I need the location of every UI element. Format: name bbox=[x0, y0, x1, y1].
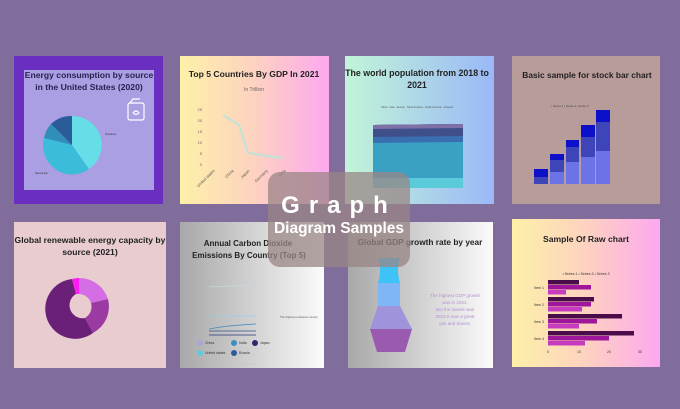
area chart bbox=[373, 124, 463, 188]
legend: United states bbox=[205, 351, 226, 355]
panel: renewable energy: Global renewable energy capacity by bbox=[15, 235, 166, 245]
panel: energy consumption bbox=[14, 56, 163, 204]
pie chart: Natural gas bbox=[35, 172, 49, 175]
panel: GDP top 5: Germany bbox=[254, 168, 269, 183]
title overlay bbox=[268, 172, 410, 267]
panel: world population bbox=[345, 56, 494, 204]
callout text: But the lowest was bbox=[436, 307, 475, 312]
panel: GDP top 5: 5 bbox=[200, 151, 203, 156]
panel: raw chart: Item 4 bbox=[534, 337, 544, 341]
callout text: The highest GDP growth bbox=[430, 293, 481, 298]
legend: Japan bbox=[260, 341, 270, 345]
panel: GDP top 5: Japan bbox=[239, 168, 251, 179]
panel: renewable energy bbox=[14, 222, 166, 368]
panel: GDP growth: Global GDP growth rate by year bbox=[358, 237, 483, 247]
line chart: emissions bbox=[209, 285, 256, 364]
legend: Russia bbox=[239, 351, 250, 355]
panel: raw chart: Sample Of Raw chart bbox=[543, 234, 629, 244]
panel: raw chart: 30 bbox=[638, 350, 642, 354]
callout text: 2019.It was a great bbox=[435, 314, 475, 319]
panel: world population: 2021 bbox=[407, 80, 427, 90]
panel: raw chart: • Series 1 • Series 2 • Series 3 bbox=[562, 272, 610, 276]
panel: GDP top 5 bbox=[180, 56, 329, 204]
heading: energy: Energy consumption by source bbox=[25, 70, 153, 80]
panel: CO2 emissions bbox=[180, 222, 324, 368]
panel: GDP top 5: 20 bbox=[198, 118, 203, 123]
panel: CO2 emissions: Annual Carbon Dioxide bbox=[204, 239, 293, 248]
panel: raw chart: 0 bbox=[547, 350, 549, 354]
legend: China bbox=[205, 341, 214, 345]
panel: stock bar chart: • Series 1 • Series 2 • Series 3 bbox=[551, 104, 589, 108]
panel: raw chart: 20 bbox=[607, 350, 611, 354]
stacked bars bbox=[534, 110, 610, 184]
line chart bbox=[223, 115, 283, 158]
callout text: ups and downs. bbox=[439, 321, 471, 326]
panel: raw chart bbox=[512, 219, 660, 367]
callout text bbox=[430, 293, 481, 326]
panel: GDP top 5: United states bbox=[196, 168, 216, 188]
panel: raw chart: Item 2 bbox=[534, 303, 544, 307]
pie chart: Petroleum bbox=[105, 133, 116, 136]
panel: CO2 emissions: Emissions By Country (Top 5) bbox=[192, 251, 306, 260]
panel: stock bar chart bbox=[512, 56, 660, 204]
panel: raw chart: Item 1 bbox=[534, 286, 544, 290]
panel: GDP top 5: 10 bbox=[198, 140, 203, 145]
panel: stock bar chart: Basic sample for stock bar chart bbox=[522, 70, 652, 80]
panel: energy consumption: in the United States (2020) bbox=[35, 82, 143, 92]
donut chart bbox=[45, 278, 109, 339]
horizontal bars bbox=[548, 280, 634, 346]
icon: fuel can bbox=[128, 99, 144, 120]
panel: GDP top 5: China bbox=[224, 168, 235, 179]
panel: GDP top 5: 25 bbox=[198, 107, 203, 112]
panel: GDP growth bbox=[348, 222, 493, 368]
legend: India bbox=[239, 341, 247, 345]
panel: GDP top 5: 15 bbox=[198, 129, 203, 134]
legend bbox=[197, 340, 270, 356]
panel: GDP top 5: India bbox=[277, 168, 287, 178]
pie chart bbox=[35, 116, 116, 175]
panel: world population: The world population from 2018 to bbox=[345, 68, 489, 78]
panel: raw chart: Item 3 bbox=[534, 320, 544, 324]
panel: GDP top 5: 0 bbox=[200, 162, 203, 167]
title overlay: Diagram Samples bbox=[274, 220, 404, 237]
funnel chart bbox=[370, 258, 412, 352]
title overlay: Graph bbox=[281, 192, 397, 219]
panel: GDP top 5: In Trillion bbox=[244, 87, 264, 93]
callout text: was in 2021. bbox=[442, 300, 468, 305]
panel: raw chart: 10 bbox=[577, 350, 581, 354]
panel: renewable energy: source (2021) bbox=[62, 247, 118, 257]
panel: CO2 emissions: The highest emissions country bbox=[280, 315, 318, 319]
panel: world population: Africa · Asia · Europe · North America · South America · Oceania bbox=[381, 106, 453, 109]
panel: GDP top 5: Top 5 Countries By GDP In 2021 bbox=[189, 69, 319, 79]
